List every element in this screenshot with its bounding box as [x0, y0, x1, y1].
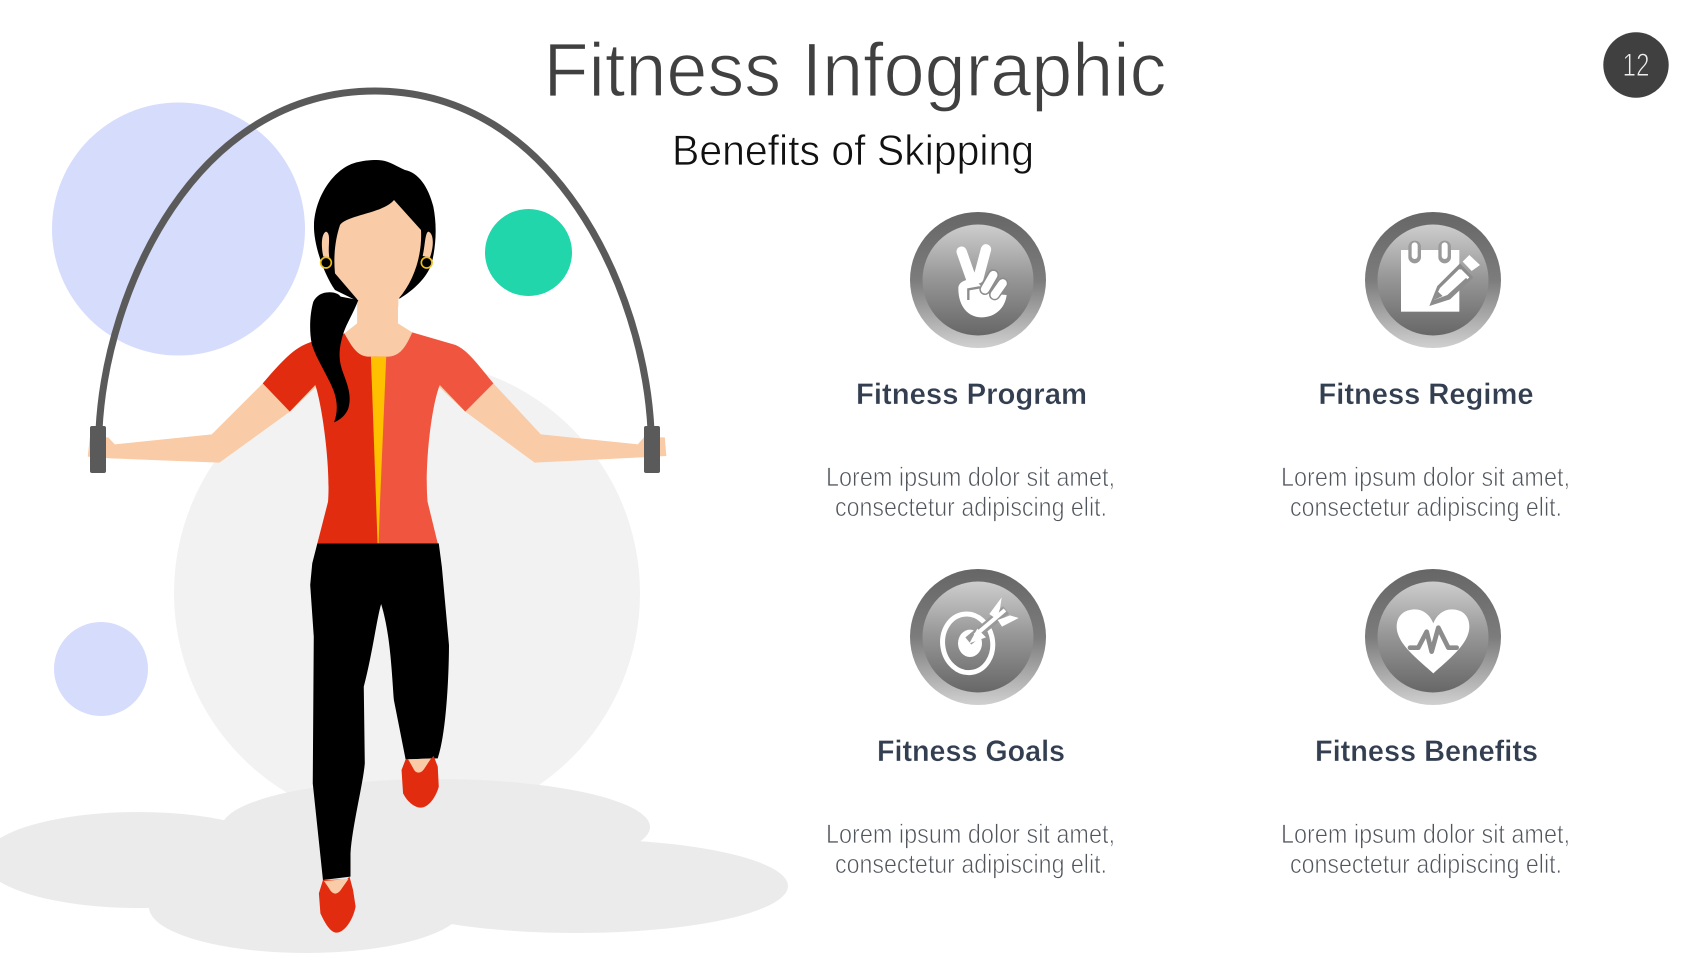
- body text: [1281, 819, 1570, 879]
- raised shoe: [402, 756, 439, 808]
- lower foot: [324, 879, 348, 894]
- heading: Fitness Program: [856, 378, 1087, 411]
- face: [334, 200, 421, 307]
- title: Fitness Infographic: [544, 28, 1166, 113]
- hair: [314, 160, 436, 301]
- rope handle left: [90, 426, 106, 473]
- icon: peace hand: [910, 212, 1046, 348]
- subtitle: Benefits of Skipping: [672, 127, 1034, 175]
- decorative background: large lavender circle: [52, 102, 305, 356]
- decorative background: teal circle: [485, 209, 572, 296]
- panel: Fitness Program: [826, 212, 1115, 522]
- body: [88, 293, 666, 933]
- ears: [322, 232, 433, 257]
- body text: [826, 819, 1115, 879]
- decorative background: small lavender circle: [54, 622, 148, 716]
- arms: [88, 367, 666, 463]
- lower shoe: [319, 877, 356, 933]
- body text: Lorem ipsum dolor sit amet,: [1281, 819, 1570, 849]
- rope handle right: [644, 426, 660, 473]
- neck and collar: [344, 293, 412, 357]
- shirt yellow stripe: [371, 357, 386, 543]
- earrings: [321, 257, 432, 268]
- ground shadow: [0, 779, 788, 953]
- panel: Fitness Goals: [826, 569, 1115, 879]
- jump rope: [99, 91, 651, 430]
- body text: consectetur adipiscing elit.: [1290, 492, 1562, 522]
- raised foot: [408, 758, 431, 773]
- shirt left half: [263, 333, 378, 543]
- panel: Fitness Benefits: [1281, 569, 1570, 879]
- body text: consectetur adipiscing elit.: [835, 849, 1107, 879]
- page number badge: 12: [1622, 47, 1650, 83]
- body text: Lorem ipsum dolor sit amet,: [826, 462, 1115, 492]
- face, ears and earrings: [321, 200, 433, 307]
- body text: [826, 462, 1115, 522]
- shirt right half: [378, 332, 493, 543]
- ponytail: [310, 292, 358, 422]
- heading: Fitness Goals: [877, 735, 1065, 768]
- page number badge: [1603, 32, 1669, 98]
- icon: notepad and pencil: [1365, 212, 1501, 348]
- illustration: woman skipping: [88, 160, 666, 933]
- icon: heart with pulse: [1365, 569, 1501, 705]
- heading: Fitness Benefits: [1315, 735, 1538, 768]
- body text: Lorem ipsum dolor sit amet,: [1281, 462, 1570, 492]
- leggings: [310, 543, 449, 880]
- body text: consectetur adipiscing elit.: [835, 492, 1107, 522]
- heading: Fitness Regime: [1318, 378, 1534, 411]
- panel: Fitness Regime: [1281, 212, 1570, 522]
- icon: target and arrow: [910, 569, 1046, 705]
- body text: [1281, 462, 1570, 522]
- decorative background: grey circle: [174, 360, 640, 826]
- body text: Lorem ipsum dolor sit amet,: [826, 819, 1115, 849]
- body text: consectetur adipiscing elit.: [1290, 849, 1562, 879]
